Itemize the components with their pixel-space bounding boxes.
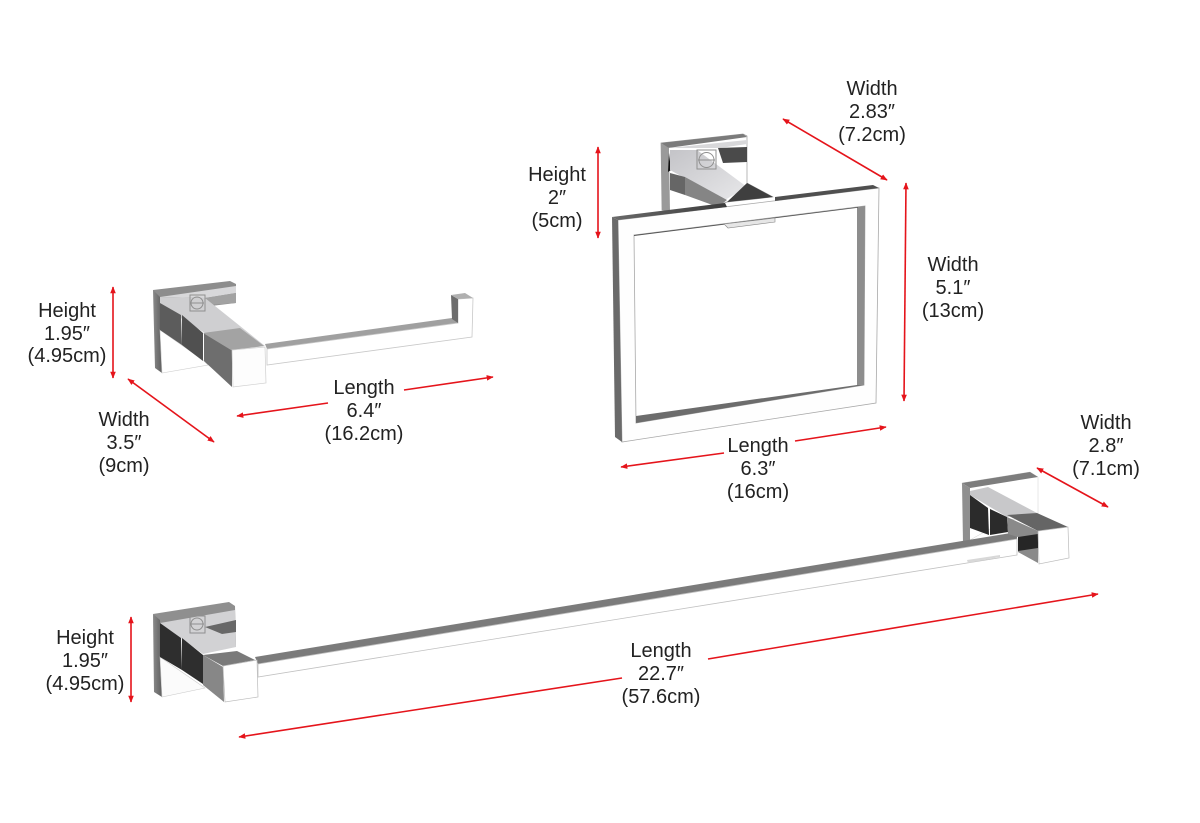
- height label: Height: [528, 164, 586, 186]
- height label: 1.95″: [44, 323, 90, 345]
- length arrow: [239, 594, 1098, 737]
- dimensions: towel ring: [528, 78, 984, 503]
- height label: (4.95cm): [28, 345, 106, 367]
- length label: 6.3″: [741, 458, 775, 480]
- bar: [255, 532, 1017, 677]
- height label: (4.95cm): [46, 673, 124, 695]
- width label: 2.8″: [1089, 435, 1123, 457]
- ring frame: [612, 185, 879, 442]
- height label: (5cm): [531, 210, 583, 232]
- depth label: 2.83″: [849, 101, 895, 123]
- height label: Height: [38, 300, 96, 322]
- depth label: Width: [846, 78, 898, 100]
- dimensions: toilet paper holder: [28, 287, 493, 477]
- height arrow: [130, 617, 132, 702]
- height arrow: [112, 287, 114, 378]
- length arrow: [237, 377, 493, 416]
- width label: Width: [1080, 412, 1132, 434]
- height label: 2″: [548, 187, 566, 209]
- paper bar: [265, 293, 473, 365]
- mounting plate: [661, 134, 773, 213]
- width label: (9cm): [98, 455, 150, 477]
- length label: Length: [333, 377, 395, 399]
- length label: 22.7″: [638, 663, 684, 685]
- length label: 6.4″: [347, 400, 381, 422]
- length label: Length: [727, 435, 789, 457]
- logo mark: [190, 295, 205, 311]
- length label: (16cm): [727, 481, 789, 503]
- width label: (13cm): [922, 300, 984, 322]
- depth label: (7.2cm): [838, 124, 906, 146]
- width label: (7.1cm): [1072, 458, 1140, 480]
- arm: [670, 150, 775, 208]
- width arrow: [1037, 468, 1108, 507]
- logo mark: [190, 616, 205, 633]
- right bracket plate: [962, 472, 1038, 544]
- width label: 5.1″: [936, 277, 970, 299]
- width label: Width: [98, 409, 150, 431]
- height arrow: [597, 147, 599, 238]
- width label: 3.5″: [107, 432, 141, 454]
- depth arrow: [783, 119, 887, 180]
- towel bar: [153, 472, 1069, 702]
- width arrow: [128, 379, 214, 442]
- mounting plate: [153, 281, 236, 373]
- dimensions: towel bar: [46, 412, 1140, 737]
- length label: Length: [630, 640, 692, 662]
- height label: Height: [56, 627, 114, 649]
- height label: 1.95″: [62, 650, 108, 672]
- length label: (57.6cm): [622, 686, 700, 708]
- length label: (16.2cm): [325, 423, 403, 445]
- towel ring: [612, 134, 879, 442]
- left bracket: [153, 602, 258, 702]
- right bracket arm: [970, 487, 1069, 564]
- width label: Width: [927, 254, 979, 276]
- logo mark: [697, 150, 716, 169]
- arm: [160, 297, 266, 387]
- length arrow: [621, 427, 886, 467]
- width arrow: [904, 183, 906, 401]
- toilet paper holder: [153, 281, 473, 387]
